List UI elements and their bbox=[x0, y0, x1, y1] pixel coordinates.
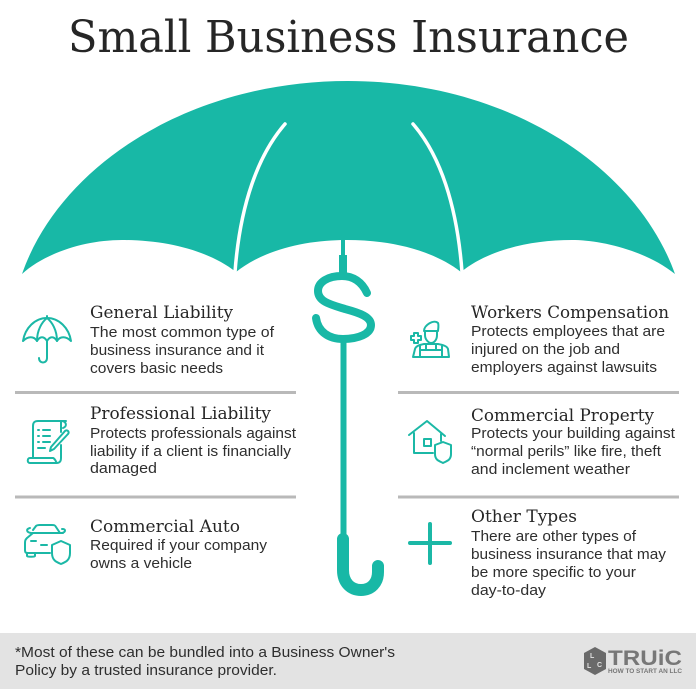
title: Small Business Insurance bbox=[68, 12, 629, 63]
icon: scroll and pen bbox=[28, 421, 69, 463]
item: other types: Other Types bbox=[471, 507, 577, 526]
dollar sign bbox=[316, 276, 371, 339]
item: other types bbox=[410, 507, 667, 599]
item: commercial property: Protects your building against bbox=[471, 425, 676, 442]
canopy rib right bbox=[413, 124, 462, 272]
umbrella illustration bbox=[22, 81, 675, 590]
footer band: Policy by a trusted insurance provider. bbox=[15, 662, 277, 679]
item: general liability: covers basic needs bbox=[90, 360, 223, 377]
item: commercial auto bbox=[25, 517, 268, 572]
item: commercial auto: Required if your company bbox=[90, 537, 268, 554]
icon: car with shield bbox=[25, 525, 70, 564]
item: general liability bbox=[23, 303, 275, 377]
logo: TRUIC: TRUiC bbox=[608, 647, 682, 670]
item: other types: day-to-day bbox=[471, 582, 547, 599]
logo: TRUIC: L bbox=[590, 653, 595, 660]
item: professional liability: Protects professionals against bbox=[90, 425, 297, 442]
item: workers compensation: Protects employees that are bbox=[471, 323, 665, 340]
item: workers compensation: Workers Compensation bbox=[471, 303, 669, 322]
item: general liability: The most common type of bbox=[90, 324, 275, 341]
item: commercial auto: owns a vehicle bbox=[90, 555, 192, 572]
item: other types: There are other types of bbox=[471, 528, 637, 545]
item: commercial property bbox=[409, 406, 676, 478]
item: other types: business insurance that may bbox=[471, 546, 667, 563]
item: commercial property: Commercial Property bbox=[471, 406, 655, 425]
logo: TRUIC: HOW TO START AN LLC bbox=[608, 668, 682, 675]
item: commercial property: “normal perils” like fire, theft bbox=[471, 443, 662, 460]
icon: plus bbox=[410, 524, 450, 563]
item: workers compensation: injured on the job and bbox=[471, 341, 620, 358]
logo: TRUIC bbox=[584, 647, 682, 675]
icon: worker with plus bbox=[411, 322, 449, 357]
umbrella canopy bbox=[22, 81, 675, 274]
logo: TRUIC: L bbox=[587, 663, 592, 670]
item: professional liability bbox=[28, 404, 297, 477]
icon: house with shield bbox=[409, 421, 451, 463]
item: professional liability: Professional Liability bbox=[90, 404, 272, 423]
item: general liability: business insurance and it bbox=[90, 342, 265, 359]
item: commercial property: and inclement weather bbox=[471, 461, 630, 478]
icon: umbrella bbox=[23, 316, 71, 362]
item: other types: be more specific to your bbox=[471, 564, 636, 581]
item: workers compensation: employers against lawsuits bbox=[471, 359, 657, 376]
umbrella shaft bbox=[341, 238, 345, 256]
canopy rib left bbox=[235, 124, 285, 272]
item: workers compensation bbox=[411, 303, 669, 376]
logo: TRUIC: C bbox=[597, 662, 602, 669]
footer band bbox=[0, 633, 696, 689]
footnote: *Most of these can be bundled into a Business Owner's bbox=[15, 644, 395, 661]
umbrella handle bbox=[343, 539, 378, 590]
item: commercial auto: Commercial Auto bbox=[90, 517, 240, 536]
item: general liability: General Liability bbox=[90, 303, 234, 322]
item: professional liability: damaged bbox=[90, 460, 157, 477]
item: professional liability: liability if a client is financially bbox=[90, 443, 292, 460]
